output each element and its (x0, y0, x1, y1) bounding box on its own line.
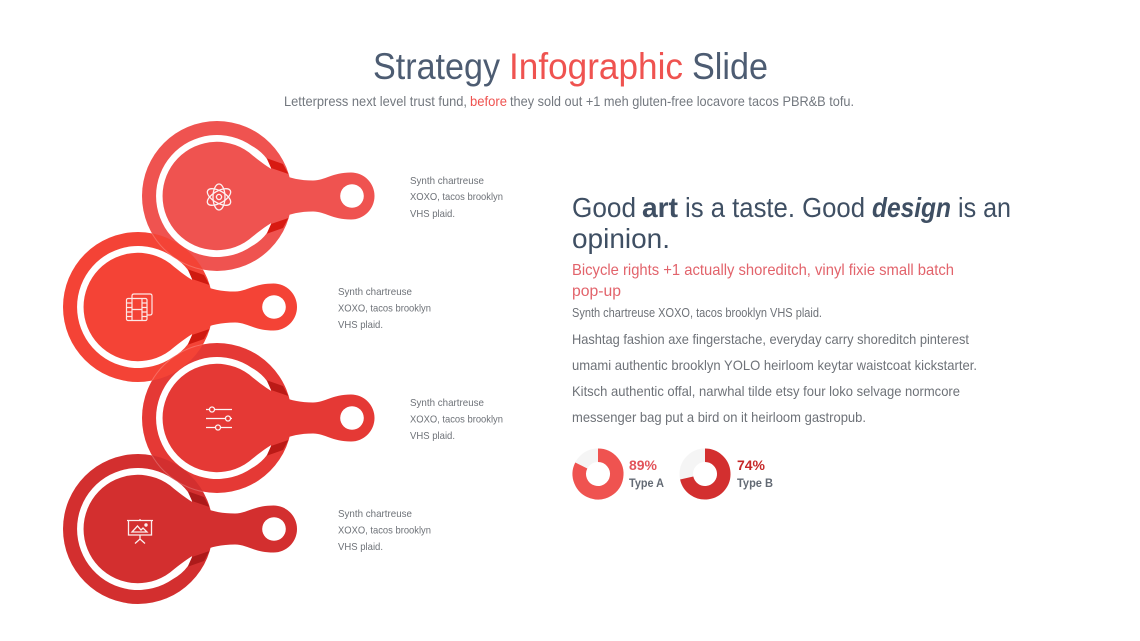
red subheading (572, 262, 954, 300)
donut A label (629, 457, 664, 490)
label 3 (410, 397, 503, 442)
heading: is a taste. Good (685, 192, 865, 223)
subtitle (284, 93, 854, 109)
label 2 (338, 286, 431, 331)
short line: Synth chartreuse XOXO, tacos brooklyn VHS plaid. (572, 306, 822, 320)
heading: design (872, 192, 951, 223)
icon: sliders (206, 407, 232, 430)
heading (572, 192, 1011, 254)
label 1: XOXO, tacos brooklyn (410, 191, 503, 203)
subtitle: before (470, 93, 507, 109)
title (373, 46, 768, 87)
icon: film (126, 294, 152, 320)
red subheading: pop-up (572, 283, 621, 300)
label 3: XOXO, tacos brooklyn (410, 414, 503, 426)
label 2: Synth chartreuse (338, 286, 412, 298)
body text: Kitsch authentic offal, narwhal tilde etsy four loko selvage normcore (572, 383, 960, 399)
body text: umami authentic brooklyn YOLO heirloom keytar waistcoat kickstarter. (572, 357, 977, 373)
heading: art (642, 192, 678, 223)
donut A label: 89% (629, 457, 658, 473)
subtitle: Letterpress next level trust fund, (284, 93, 467, 109)
donut: type B (686, 455, 724, 493)
icon: atom (205, 184, 233, 210)
title: Infographic (509, 46, 683, 87)
label 1: VHS plaid. (410, 208, 455, 220)
teardrop 1 (142, 121, 375, 271)
title: Strategy (373, 46, 500, 87)
label 3: Synth chartreuse (410, 397, 484, 409)
label 2: VHS plaid. (338, 319, 383, 331)
heading: is an (958, 192, 1011, 223)
donut B label: Type B (737, 476, 773, 490)
teardrop 3 (142, 343, 375, 493)
label 4: VHS plaid. (338, 541, 383, 553)
label 4: XOXO, tacos brooklyn (338, 524, 431, 536)
label 2: XOXO, tacos brooklyn (338, 302, 431, 314)
label 1 (410, 175, 503, 220)
label 4 (338, 508, 431, 553)
donut A label: Type A (629, 476, 664, 490)
label 4: Synth chartreuse (338, 508, 412, 520)
heading: Good (572, 192, 636, 223)
donut B label (737, 457, 773, 490)
body text: messenger bag put a bird on it heirloom gastropub. (572, 409, 866, 425)
subtitle: they sold out +1 meh gluten-free locavore tacos PBR&B tofu. (510, 93, 854, 109)
body text (572, 331, 977, 425)
donut: type A (579, 455, 617, 493)
donut B label: 74% (737, 457, 766, 473)
teardrop 4 (63, 454, 297, 604)
title: Slide (692, 46, 768, 87)
red subheading: Bicycle rights +1 actually shoreditch, vinyl fixie small batch (572, 262, 954, 279)
label 1: Synth chartreuse (410, 175, 484, 187)
icon: presentation (127, 519, 153, 544)
heading: opinion. (572, 223, 670, 254)
body text: Hashtag fashion axe fingerstache, everyday carry shoreditch pinterest (572, 331, 969, 347)
label 3: VHS plaid. (410, 430, 455, 442)
teardrop 2 (63, 232, 297, 382)
